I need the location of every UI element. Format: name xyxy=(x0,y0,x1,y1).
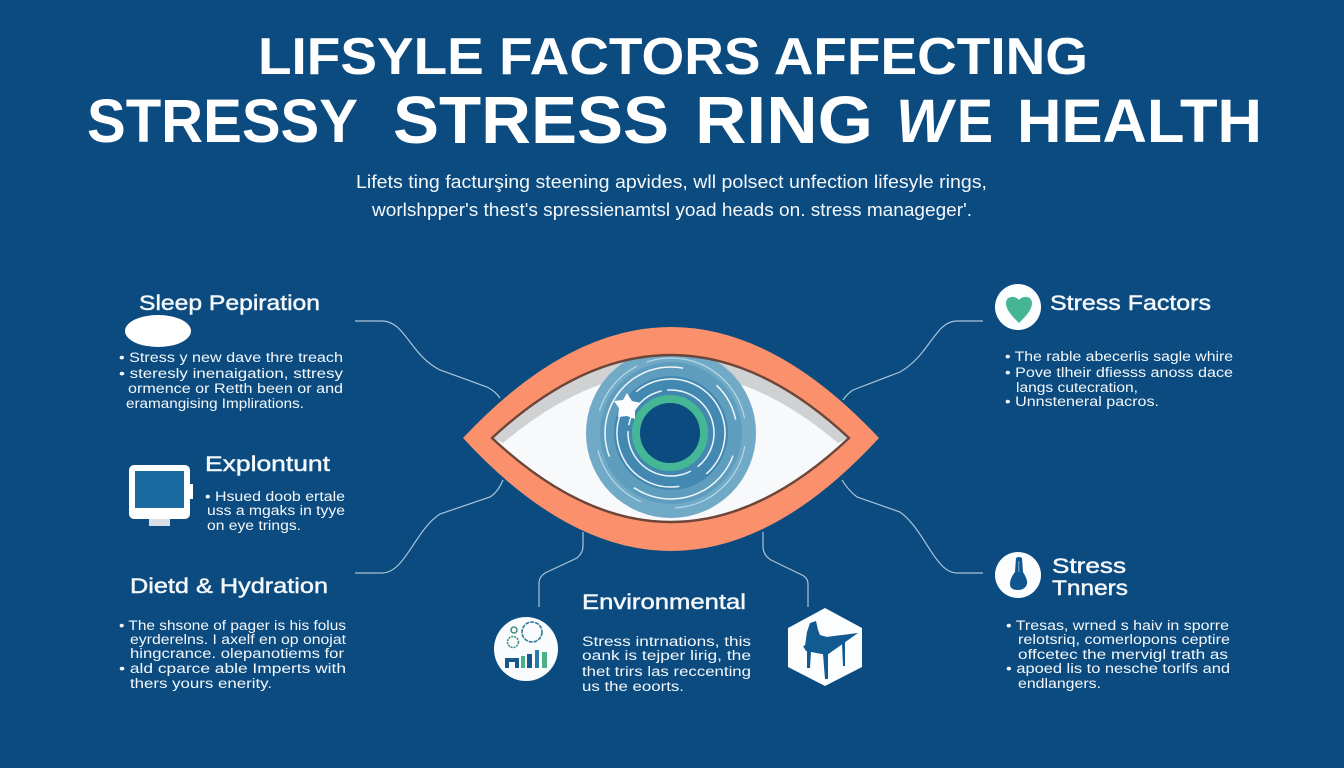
heading: stress tnners: Tnners xyxy=(1052,577,1128,600)
text block: sleep xyxy=(119,350,343,411)
text block: environmental xyxy=(582,634,751,694)
text block: sleep: • steresly inenaigation, sttresy xyxy=(119,366,343,381)
subtitle: worlshpper's thest's spressienamtsl yoad heads on. stress manageger'. xyxy=(371,200,972,220)
text block: explontunt xyxy=(205,489,345,533)
connector lines xyxy=(355,321,983,607)
text block: diet: • The shsone of pager is his folus xyxy=(119,618,346,633)
icon: thermometer xyxy=(995,552,1041,598)
text block: stress factors: langs cutecration, xyxy=(1016,380,1138,395)
text block: sleep: ormence or Retth been or and xyxy=(128,381,343,396)
icon: heart xyxy=(995,284,1041,330)
text block: environmental: oank is tejper lirig, the xyxy=(582,648,751,663)
text block: sleep: eramangising Implirations. xyxy=(126,396,304,411)
text block: environmental: us the eoorts. xyxy=(582,679,684,694)
text block: environmental: thet trirs las reccenting xyxy=(582,664,751,679)
eyelid inner outline xyxy=(492,355,849,522)
panel: diet and hydration xyxy=(119,575,346,691)
text block: stress factors: • Pove tlheir dfiesss anoss dace xyxy=(1005,365,1233,380)
heading: environmental: Environmental xyxy=(582,591,746,614)
icon: monitor xyxy=(129,465,193,526)
text block: diet: • ald cparce able Imperts with xyxy=(119,661,346,676)
sclera xyxy=(492,355,849,522)
text block: stress tnners xyxy=(1006,618,1230,691)
text block: stress tnners: relotsriq, comerlopons ceptire xyxy=(1018,632,1230,647)
text block: explontunt: uss a mgaks in tyye xyxy=(207,503,345,518)
eyelid outer shape xyxy=(463,327,879,551)
text block: stress factors: • Unnsteneral pacros. xyxy=(1005,394,1159,409)
icon: gears and bars xyxy=(494,617,558,681)
panel: environmental xyxy=(494,591,862,694)
heading: stress tnners xyxy=(1052,555,1128,600)
subtitle xyxy=(356,172,987,220)
subtitle: Lifets ting facturşing steening apvides, wll polsect unfection lifesyle rings, xyxy=(356,172,987,192)
title: E xyxy=(957,87,993,155)
text block: stress tnners: offcetec the mervigl trath as xyxy=(1018,647,1228,662)
title: HEALTH xyxy=(1017,87,1262,155)
star glint xyxy=(614,393,641,419)
central eye illustration xyxy=(463,327,879,551)
title: RING xyxy=(695,83,873,158)
text block: diet: hingcrance. olepanotiems for xyxy=(130,646,345,661)
panel: stress tnners xyxy=(995,552,1230,691)
text block: stress factors xyxy=(1005,349,1233,409)
title: STRESSY xyxy=(87,87,358,155)
text block: stress tnners: • Tresas, wrned s haiv in sporre xyxy=(1006,618,1229,633)
icon: white oval xyxy=(125,315,191,347)
title: W xyxy=(896,87,956,155)
iris and pupil xyxy=(492,346,849,522)
icon: desk in hexagon xyxy=(788,608,862,686)
heading: stress tnners: Stress xyxy=(1052,555,1126,578)
text block: environmental: Stress intrnations, this xyxy=(582,634,751,649)
heading: diet: Dietd & Hydration xyxy=(130,575,328,598)
heading: sleep: Sleep Pepiration xyxy=(139,292,320,315)
heading: stress factors: Stress Factors xyxy=(1050,292,1211,315)
text block: diet: eyrderelns. I axelf en op onojat xyxy=(130,632,346,647)
text block: stress tnners: • apoed lis to nesche torlfs and xyxy=(1006,661,1230,676)
text block: stress tnners: endlangers. xyxy=(1018,676,1101,691)
text block: explontunt: on eye trings. xyxy=(207,518,301,533)
panel: stress factors xyxy=(995,284,1233,409)
heading: explontunt: Explontunt xyxy=(205,453,330,476)
title: LIFSYLE FACTORS AFFECTING xyxy=(258,28,1088,86)
title xyxy=(87,28,1262,158)
text block: diet xyxy=(119,618,346,691)
panel: sleep xyxy=(119,292,343,411)
text block: diet: thers yours enerity. xyxy=(130,676,272,691)
panel: explontunt xyxy=(129,453,345,533)
text block: sleep: • Stress y new dave thre treach xyxy=(119,350,343,365)
text block: stress factors: • The rable abecerlis sagle whire xyxy=(1005,349,1233,364)
text block: explontunt: • Hsued doob ertale xyxy=(205,489,345,504)
title: STRESS xyxy=(393,83,669,158)
